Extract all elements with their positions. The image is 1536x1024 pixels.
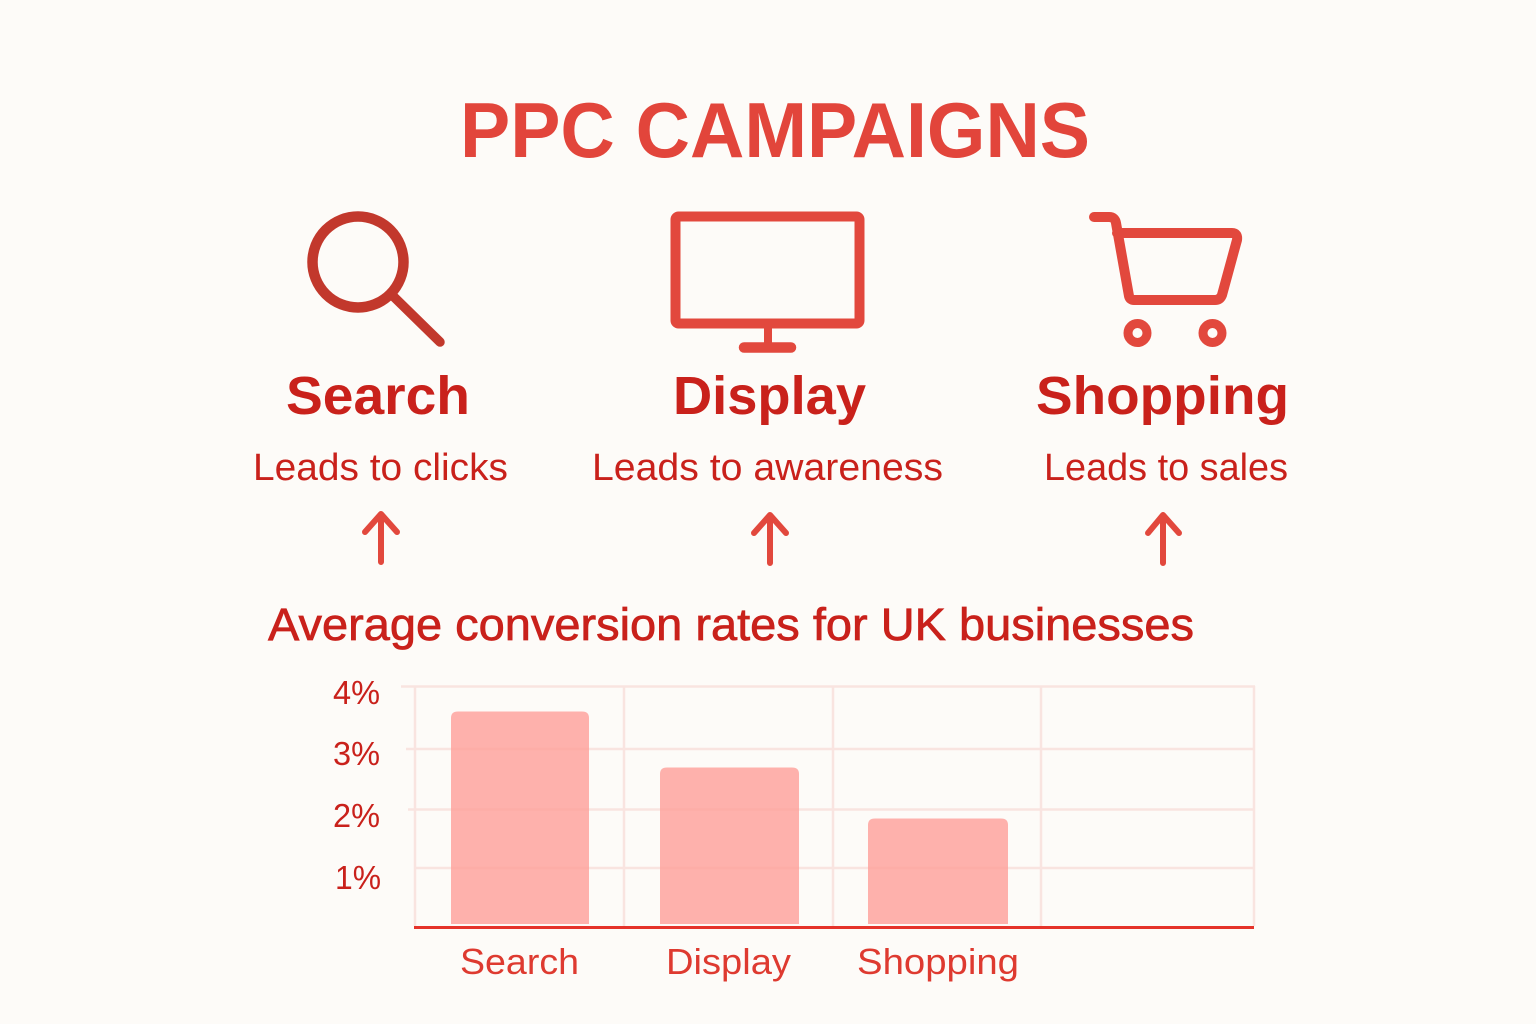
y-axis labels — [333, 674, 381, 896]
bar: Display — [660, 768, 799, 924]
icon: magnifying glass — [312, 216, 440, 342]
heading: Display: Display — [673, 366, 866, 426]
arrow: Search — [365, 514, 397, 562]
text: Leads to sales: Leads to sales — [1044, 447, 1288, 489]
chart heading: Average conversion rates for UK businesses — [268, 599, 1194, 650]
y-axis labels: 4% — [333, 674, 380, 711]
heading: Shopping: Shopping — [1036, 366, 1289, 426]
bar: Shopping — [868, 818, 1008, 924]
bar: Search — [451, 712, 589, 924]
arrow: Display — [754, 515, 786, 563]
x-axis labels — [460, 941, 1019, 982]
x-axis labels: Search — [460, 941, 579, 982]
title: PPC CAMPAIGNS — [460, 86, 1090, 174]
icon: shopping cart — [1094, 217, 1237, 342]
bar chart — [333, 674, 1255, 982]
y-axis labels: 3% — [333, 735, 380, 772]
y-axis labels: 2% — [333, 797, 380, 834]
x-axis labels: Display — [666, 941, 791, 982]
icon: monitor — [676, 216, 860, 348]
heading: Search: Search — [286, 366, 470, 426]
arrow: Shopping — [1148, 515, 1179, 563]
text: Leads to awareness: Leads to awareness — [592, 447, 943, 489]
x-axis — [414, 926, 1254, 929]
x-axis labels: Shopping — [857, 941, 1019, 982]
text: Leads to clicks: Leads to clicks — [253, 447, 508, 489]
y-axis labels: 1% — [335, 859, 381, 896]
grid lines — [401, 686, 1255, 926]
